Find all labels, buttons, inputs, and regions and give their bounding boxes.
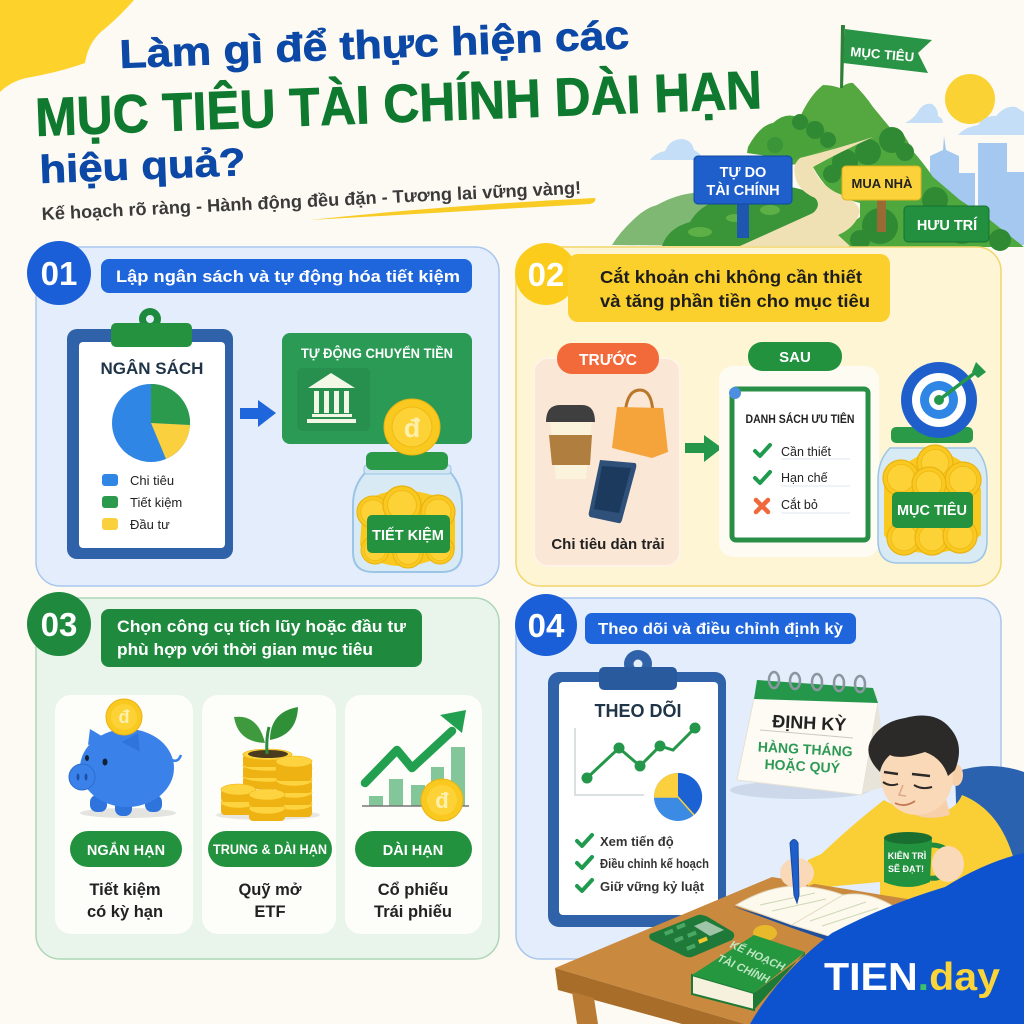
calendar xyxy=(730,672,889,799)
book: kế hoạch tài chính: TÀI CHÍNH xyxy=(715,952,772,986)
auto-transfer box xyxy=(282,333,472,444)
clouds xyxy=(650,104,1024,160)
priority list: Hạn chế xyxy=(781,471,828,485)
table xyxy=(555,877,1024,1024)
icon: phone xyxy=(589,460,636,523)
coin: đ xyxy=(118,707,130,727)
text: long term tools: Cổ phiếu xyxy=(378,881,448,899)
person xyxy=(805,716,1016,905)
coin dropping into jar xyxy=(384,399,440,455)
mug: KIÊN TRÌ xyxy=(888,850,927,861)
heading 03 xyxy=(101,609,422,667)
hair xyxy=(868,716,959,776)
legend: budget: Tiết kiệm xyxy=(130,495,182,510)
auto-transfer box: TỰ ĐỘNG CHUYỂN TIỀN xyxy=(301,344,453,361)
panel 4: monitor and adjust xyxy=(515,594,1024,1024)
coin dropping into jar: đ xyxy=(404,413,421,443)
sign: tự do tài chính: TÀI CHÍNH xyxy=(706,182,780,199)
heading 04 xyxy=(585,613,856,644)
card: long term xyxy=(345,695,482,934)
icon: piggy bank xyxy=(69,729,181,818)
text: short term tools: có kỳ hạn xyxy=(87,903,163,921)
card: short term xyxy=(55,695,193,934)
face xyxy=(881,739,963,818)
sign: hưu trí xyxy=(904,206,989,242)
icon: growth chart: đ xyxy=(435,788,449,813)
calendar: HÀNG THÁNG xyxy=(757,739,853,759)
chair xyxy=(955,766,1024,920)
mug xyxy=(884,832,950,887)
jar: savings xyxy=(353,452,462,572)
icon: bank xyxy=(307,373,356,423)
legend: budget xyxy=(102,473,182,532)
text: long term tools: Trái phiếu xyxy=(374,903,452,921)
jar: savings: TIẾT KIỆM xyxy=(372,526,444,544)
badge 03 xyxy=(27,592,91,656)
heading 02: Cắt khoản chi không cần thiết xyxy=(600,266,862,287)
coin on table xyxy=(753,925,777,941)
clipboard: tracking xyxy=(548,650,726,927)
pill: trước xyxy=(557,343,659,374)
before card xyxy=(534,343,680,566)
pill: sau: SAU xyxy=(779,349,811,366)
icon: coin stacks with plant xyxy=(216,707,320,821)
line chart xyxy=(575,722,700,795)
panel 1: budget xyxy=(27,241,499,586)
mid left hill foliage xyxy=(747,114,837,160)
pill: dài hạn xyxy=(355,831,472,867)
heading 01: Lập ngân sách và tự động hóa tiết kiệm xyxy=(116,267,460,286)
book: kế hoạch tài chính xyxy=(692,935,805,1010)
coin xyxy=(106,699,142,735)
checklist: Điều chỉnh kế hoạch xyxy=(600,856,709,871)
title line 1: Làm gì để thực hiện các xyxy=(119,13,630,77)
main mountain xyxy=(790,83,892,165)
flag: mục tiêu: MỤC TIÊU xyxy=(850,44,915,65)
card: medium long term xyxy=(202,695,336,934)
before card: Chi tiêu dàn trải xyxy=(551,536,665,553)
checklist: Giữ vững kỷ luật xyxy=(600,879,705,894)
sign: tự do tài chính: TỰ DO xyxy=(720,165,766,181)
pill: trung và dài hạn xyxy=(208,831,332,867)
legend: budget: Chi tiêu xyxy=(130,473,174,488)
calendar: ĐỊNH KỲ xyxy=(772,710,847,735)
text: medium long term tools xyxy=(238,881,302,921)
badge 02: 02 xyxy=(528,256,564,293)
after card xyxy=(719,342,879,557)
yellow sweater xyxy=(805,795,1016,905)
calendar: HOẶC QUÝ xyxy=(764,755,841,776)
badge 04: 04 xyxy=(528,607,565,644)
left hill xyxy=(612,187,818,246)
logo background wave xyxy=(750,853,1024,1024)
badge 01: 01 xyxy=(41,255,77,292)
sign: mua nhà: MUA NHÀ xyxy=(852,176,913,191)
text: medium long term tools: Quỹ mở xyxy=(238,881,302,899)
subtitle: Kế hoạch rõ ràng - Hành động đều đặn - Tương lai vững vàng! xyxy=(41,178,582,224)
sign: hưu trí: HƯU TRÍ xyxy=(917,217,978,234)
title line 3: hiệu quả? xyxy=(39,141,246,192)
arrow: blue xyxy=(240,400,276,427)
decorative yellow corner blob xyxy=(0,0,134,92)
priority list xyxy=(729,387,868,540)
text: long term tools xyxy=(374,881,452,921)
heading 02: và tăng phần tiền cho mục tiêu xyxy=(600,291,870,311)
left hill light patches xyxy=(688,205,780,237)
clipboard: budget: NGÂN SÁCH xyxy=(101,359,203,378)
icon: target jar xyxy=(878,362,987,563)
sign: tự do tài chính xyxy=(694,156,792,238)
pill: sau xyxy=(748,342,842,371)
checklist xyxy=(577,834,709,894)
badge 04 xyxy=(515,594,577,656)
panel 3: tools xyxy=(27,592,499,959)
hand holding pen xyxy=(780,840,830,903)
icon: target xyxy=(901,362,986,438)
badge 01 xyxy=(27,241,91,305)
mug: SẼ ĐẠT! xyxy=(888,864,924,874)
landscape illustration xyxy=(612,25,1024,251)
hand on mug xyxy=(932,846,964,882)
pie chart: budget xyxy=(112,384,190,462)
sun xyxy=(945,74,995,124)
clipboard: tracking: THEO DÕI xyxy=(594,700,682,721)
icon: shopping bag xyxy=(612,390,668,458)
right hill xyxy=(813,130,1024,247)
text: short term tools: Tiết kiệm xyxy=(89,881,161,899)
text: short term tools xyxy=(87,881,163,921)
flag: mục tiêu xyxy=(843,29,932,73)
right hill dark foliage xyxy=(823,127,1011,251)
calculator xyxy=(649,915,734,957)
pill: trung và dài hạn: TRUNG & DÀI HẠN xyxy=(213,842,327,857)
pill: dài hạn: DÀI HẠN xyxy=(383,842,443,859)
checklist: Xem tiến độ xyxy=(600,834,674,849)
city skyline xyxy=(930,136,1024,245)
pill: ngắn hạn xyxy=(70,831,182,867)
priority list: DANH SÁCH ƯU TIÊN xyxy=(746,413,854,426)
heading 03: Chọn công cụ tích lũy hoặc đầu tư xyxy=(117,617,407,636)
yellow underline swoosh xyxy=(310,198,595,220)
legend: budget: Đầu tư xyxy=(130,517,170,532)
icon: target jar: MỤC TIÊU xyxy=(897,501,967,519)
open notebook xyxy=(732,886,902,942)
pill: trước: TRƯỚC xyxy=(579,351,637,369)
pill: ngắn hạn: NGẮN HẠN xyxy=(87,841,165,859)
heading 04: Theo dõi và điều chỉnh định kỳ xyxy=(598,621,843,638)
sign: mua nhà xyxy=(842,166,921,232)
heading 03: phù hợp với thời gian mục tiêu xyxy=(117,640,373,659)
title line 2: MỤC TIÊU TÀI CHÍNH DÀI HẠN xyxy=(34,59,763,148)
priority list: Cắt bỏ xyxy=(781,497,818,512)
clipboard: budget xyxy=(67,308,233,559)
book: kế hoạch tài chính: KẾ HOẠCH xyxy=(728,938,788,974)
left hill dark foliage xyxy=(662,187,818,246)
icon: coffee cup xyxy=(546,405,595,479)
arrow: green xyxy=(685,435,722,462)
badge 03: 03 xyxy=(41,606,77,643)
winding road xyxy=(740,137,873,246)
priority list: Cần thiết xyxy=(781,445,832,459)
badge 02 xyxy=(515,243,577,305)
flag pole xyxy=(840,25,845,88)
pie chart: tracking xyxy=(654,773,702,821)
heading 01 xyxy=(101,259,472,293)
heading 02 xyxy=(568,254,890,322)
text: medium long term tools: ETF xyxy=(254,903,286,921)
logo: TIEN.day: TIEN.day xyxy=(824,956,1000,999)
panel 2: cut spending xyxy=(515,243,1001,586)
icon: growth chart xyxy=(362,710,469,821)
